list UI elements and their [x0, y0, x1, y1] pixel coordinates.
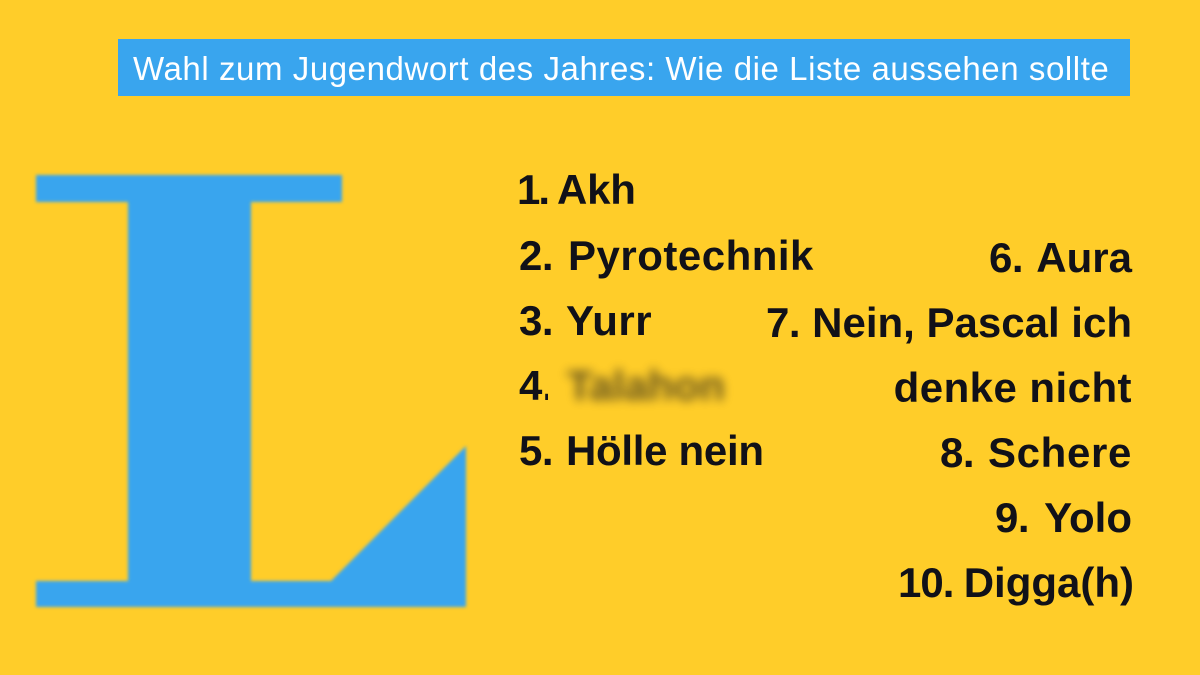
item 1	[517, 166, 636, 213]
item 8: 8.	[940, 429, 974, 476]
item 6	[989, 234, 1132, 281]
item 10: 10.	[898, 559, 953, 606]
item 6: Aura	[1036, 234, 1132, 281]
item 9: 9.	[995, 494, 1029, 541]
item 10: Digga(h)	[964, 559, 1134, 606]
item 7 line 2: denke nicht	[894, 364, 1132, 411]
item 7 line 1: 7.	[766, 299, 800, 346]
item 6: 6.	[989, 234, 1023, 281]
item 5: 5.	[519, 427, 553, 474]
item 5: Hölle nein	[566, 427, 764, 474]
icon: blue Langenscheidt L logo	[34, 172, 468, 610]
title banner: Wahl zum Jugendwort des Jahres: Wie die Liste aussehen sollte	[133, 50, 1109, 87]
title banner	[118, 39, 1130, 96]
item 3: 3.	[519, 297, 553, 344]
item 9	[995, 494, 1132, 541]
item 1: 1.	[517, 166, 548, 213]
item 8: Schere	[988, 429, 1132, 476]
item 7 line 1: Nein, Pascal ich	[812, 299, 1132, 346]
item 3: Yurr	[566, 297, 652, 344]
item 9: Yolo	[1044, 494, 1132, 541]
item 1: Akh	[557, 166, 636, 213]
item 4 blurred word: Talahon	[567, 362, 725, 409]
left list column	[517, 166, 814, 474]
item 2: 2.	[519, 232, 553, 278]
item 2: Pyrotechnik	[568, 232, 814, 278]
item 3	[519, 297, 652, 344]
